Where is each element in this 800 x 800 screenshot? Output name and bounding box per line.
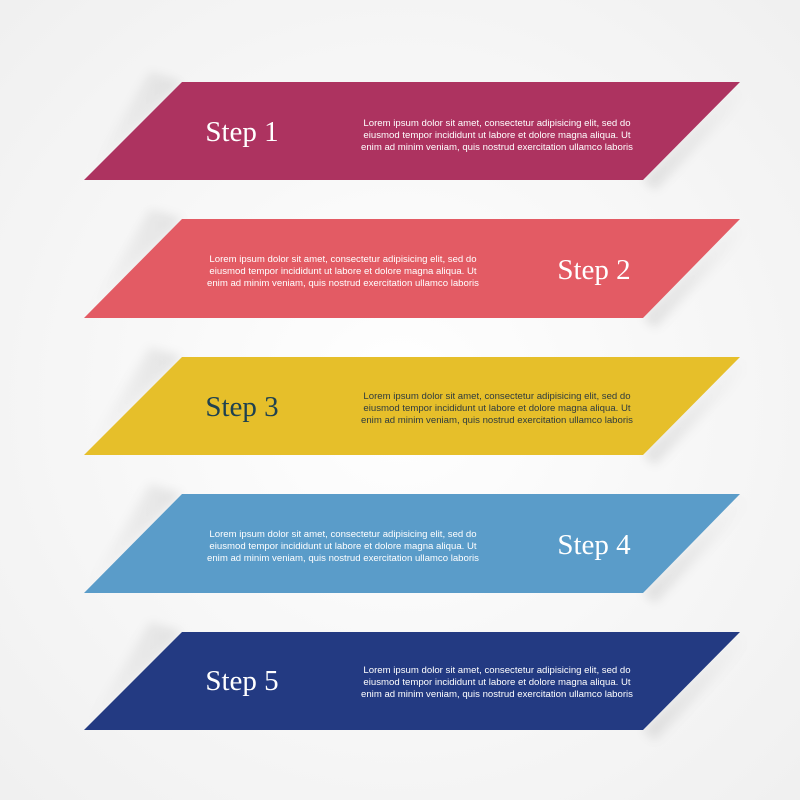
text block: step 5: Lorem ipsum dolor sit amet, consectetur adipisicing elit, sed do xyxy=(363,665,631,676)
text block: step 3: enim ad minim veniam, quis nostrud exercitation ullamco laboris xyxy=(361,415,633,426)
text block: step 2: enim ad minim veniam, quis nostrud exercitation ullamco laboris xyxy=(207,278,479,289)
text block: step 5: eiusmod tempor incididunt ut labore et dolore magna aliqua. Ut xyxy=(363,677,631,688)
banner: step 2 xyxy=(84,209,748,328)
text block: step 2: Lorem ipsum dolor sit amet, consectetur adipisicing elit, sed do xyxy=(209,254,477,265)
text block: step 1: Lorem ipsum dolor sit amet, consectetur adipisicing elit, sed do xyxy=(363,118,631,129)
heading: step 2: Step 2 xyxy=(557,254,631,286)
text block: step 2: eiusmod tempor incididunt ut labore et dolore magna aliqua. Ut xyxy=(209,266,477,277)
text block: step 4: eiusmod tempor incididunt ut labore et dolore magna aliqua. Ut xyxy=(209,541,477,552)
banner: step 3 xyxy=(84,347,748,465)
heading: step 3: Step 3 xyxy=(205,391,279,423)
heading: step 4: Step 4 xyxy=(557,529,631,561)
text block: step 5: enim ad minim veniam, quis nostrud exercitation ullamco laboris xyxy=(361,689,633,700)
text block: step 1: enim ad minim veniam, quis nostrud exercitation ullamco laboris xyxy=(361,142,633,153)
banner: step 1 xyxy=(84,72,748,190)
text block: step 1: eiusmod tempor incididunt ut labore et dolore magna aliqua. Ut xyxy=(363,130,631,141)
banner: step 4 xyxy=(84,484,748,603)
text block: step 3: eiusmod tempor incididunt ut labore et dolore magna aliqua. Ut xyxy=(363,403,631,414)
heading: step 1: Step 1 xyxy=(205,116,279,148)
text block: step 4: Lorem ipsum dolor sit amet, consectetur adipisicing elit, sed do xyxy=(209,529,477,540)
text block: step 4: enim ad minim veniam, quis nostrud exercitation ullamco laboris xyxy=(207,553,479,564)
text block: step 3: Lorem ipsum dolor sit amet, consectetur adipisicing elit, sed do xyxy=(363,391,631,402)
heading: step 5: Step 5 xyxy=(205,665,279,697)
banner: step 5 xyxy=(84,622,748,740)
